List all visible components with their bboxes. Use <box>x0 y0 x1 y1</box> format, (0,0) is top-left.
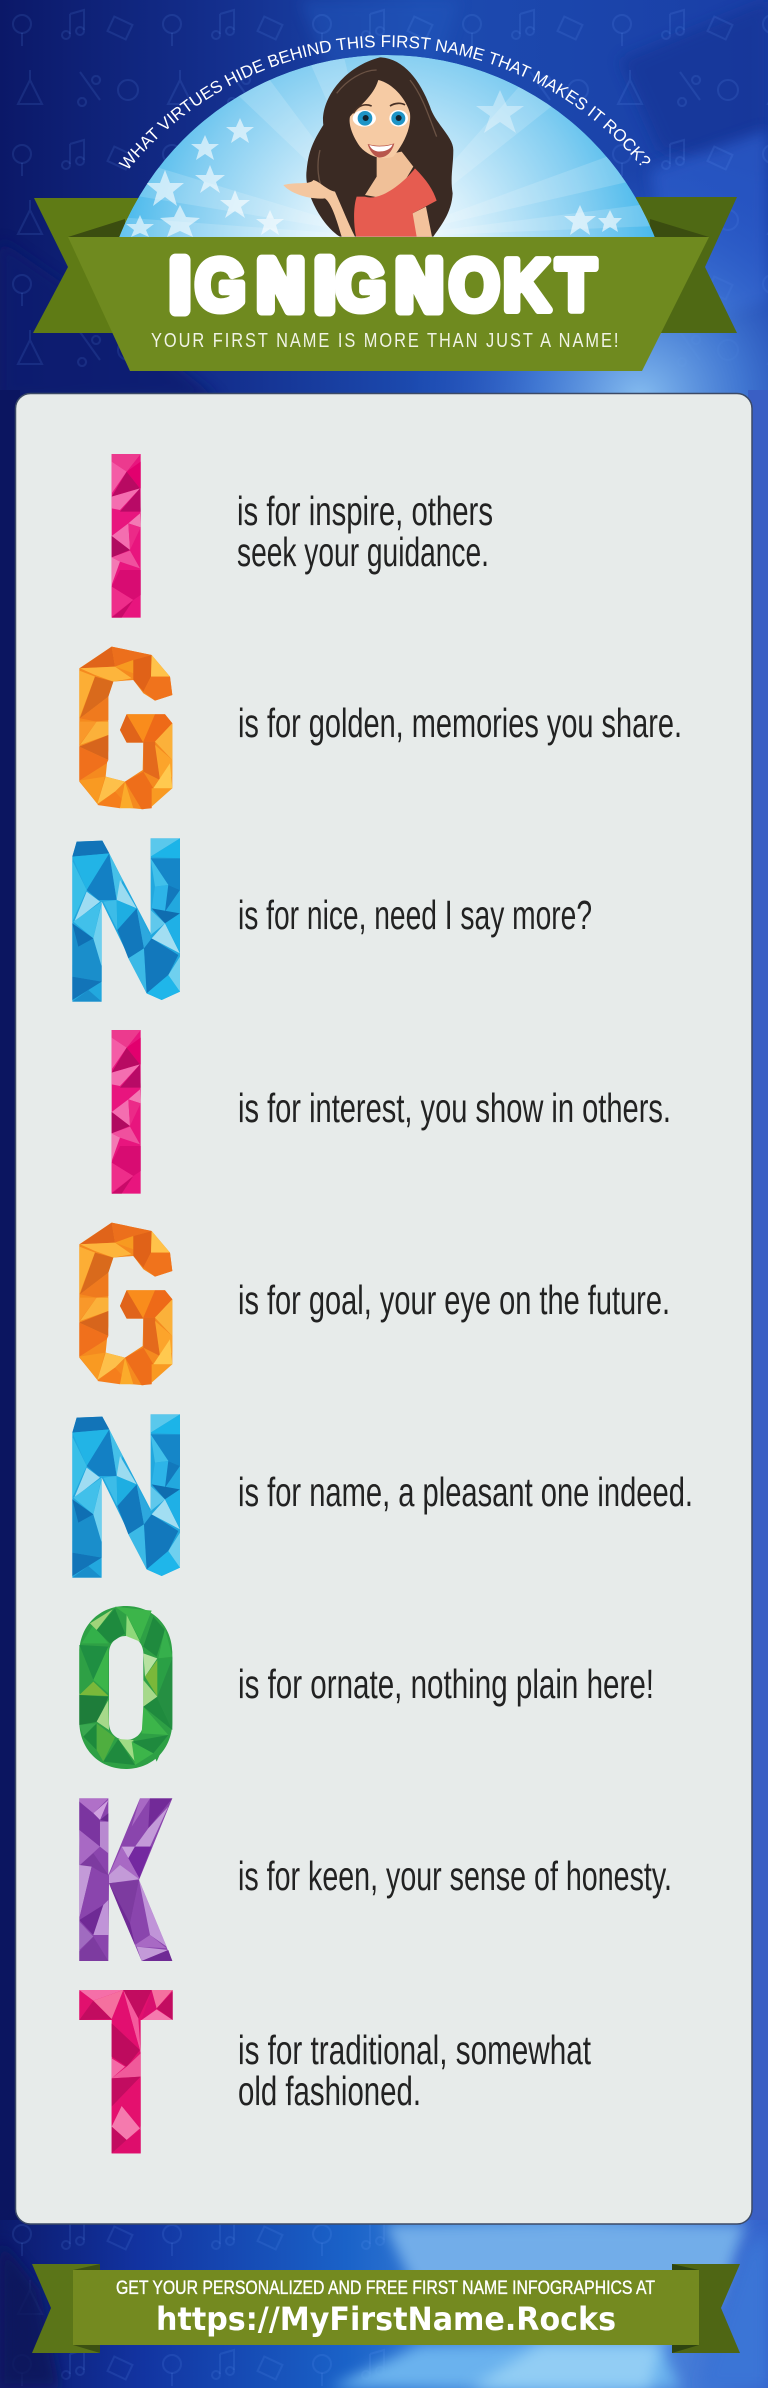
text: nice: is for nice, need I say more? <box>238 892 592 938</box>
icon: letter G <box>79 1223 172 1385</box>
footer ribbon tails <box>32 2264 740 2353</box>
footer url: https://MyFirstName.Rocks <box>156 2300 616 2338</box>
text: inspire: seek your guidance. <box>237 529 489 575</box>
icon: letter I <box>112 454 141 618</box>
hair <box>306 57 453 237</box>
illustration dome <box>119 55 655 237</box>
icon: letter I <box>112 1030 141 1194</box>
text: traditional <box>238 2027 591 2114</box>
text: inspire: is for inspire, others <box>237 488 493 534</box>
rays <box>119 58 650 237</box>
icon: letter K <box>79 1798 172 1961</box>
text: inspire <box>237 488 493 575</box>
background: bottom band <box>0 2220 768 2388</box>
icon: letter T <box>79 1990 173 2153</box>
ribbon tails <box>33 197 737 333</box>
shirt <box>354 168 437 237</box>
text: traditional: is for traditional, somewhat <box>238 2027 591 2073</box>
stars <box>126 90 622 237</box>
mouth <box>368 143 394 157</box>
hand and left arm <box>283 180 355 237</box>
background: top starburst <box>0 0 768 400</box>
face <box>350 80 410 158</box>
text: traditional: old fashioned. <box>238 2068 421 2114</box>
icon: letter N <box>72 838 180 1002</box>
eyes <box>353 110 376 127</box>
neck and chest <box>365 152 413 198</box>
footer ribbon <box>32 2264 740 2353</box>
icon: letter O <box>79 1606 172 1769</box>
curved tagline: WHAT VIRTUES HIDE BEHIND THIS FIRST NAME THAT MAKES IT ROCK? <box>118 35 650 168</box>
background: side strips <box>0 390 768 2230</box>
subtitle: YOUR FIRST NAME IS MORE THAN JUST A NAME! <box>151 328 618 351</box>
icon: letter G <box>79 647 172 809</box>
footer ribbon front <box>73 2270 699 2345</box>
character: woman presenting <box>283 57 453 237</box>
arm right <box>413 207 432 237</box>
ribbon front <box>68 237 709 371</box>
panel: letter list <box>16 394 752 2224</box>
icon: letter N <box>72 1414 180 1578</box>
title: IGNIGNOKT <box>171 245 596 326</box>
footer line one: GET YOUR PERSONALIZED AND FREE FIRST NAME INFOGRAPHICS AT <box>116 2278 655 2299</box>
